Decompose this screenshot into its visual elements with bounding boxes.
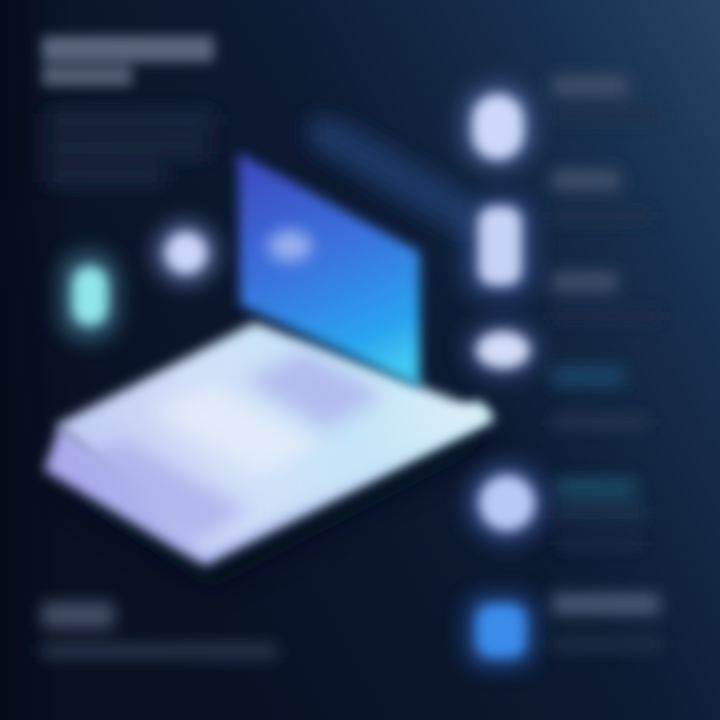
right icon 2 [462, 196, 536, 300]
bottom left text block [42, 602, 277, 658]
right icon 4 [465, 461, 549, 545]
laptop base [56, 322, 494, 552]
title block [42, 36, 214, 86]
right label 1 [552, 76, 662, 122]
laptop illustration [44, 152, 500, 590]
right label 3 [552, 272, 662, 322]
intro text block [45, 112, 215, 184]
right label 2 [552, 170, 652, 222]
right icon 5 [464, 592, 538, 670]
laptop base front edge [44, 400, 494, 566]
right icon 3 [463, 318, 543, 382]
laptop shadow [60, 420, 500, 590]
right label 6 [552, 594, 662, 650]
keyboard pale stripe [150, 385, 320, 475]
screen highlight [268, 230, 312, 262]
right icon 1 [458, 80, 538, 172]
icon: left circle [152, 219, 220, 287]
right label 5 [556, 478, 646, 549]
keyboard highlight [245, 350, 385, 430]
lower left key band [70, 440, 250, 545]
right label 4 [552, 366, 648, 428]
laptop screen [238, 152, 420, 388]
decorative back panel [310, 115, 470, 240]
icon: left capsule [58, 250, 120, 342]
